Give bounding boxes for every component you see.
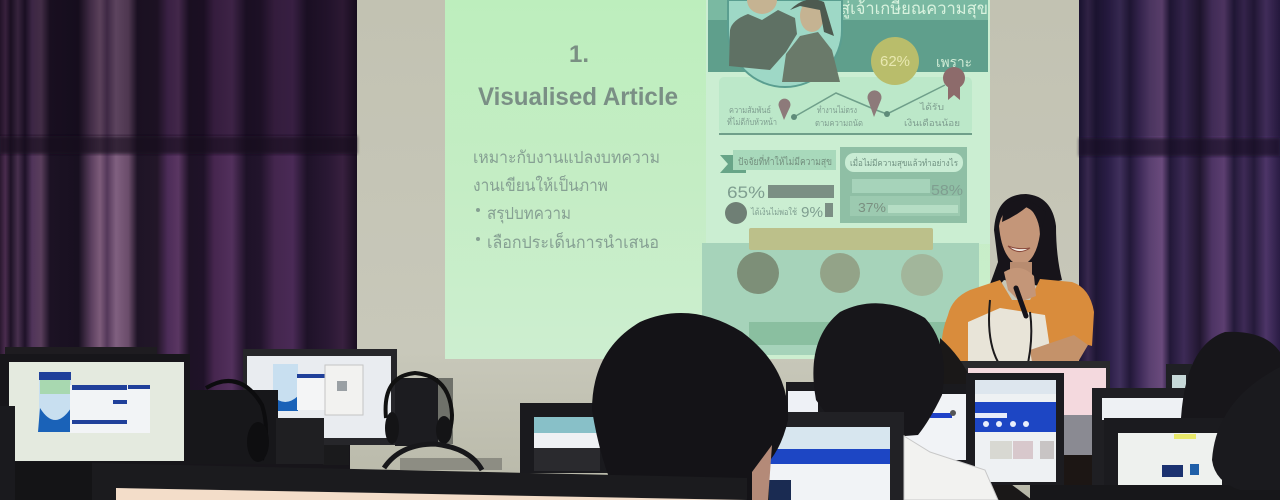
slide description: งานเขียนให้เป็นภาพ: [473, 174, 608, 195]
outcome panel: 58%: [931, 182, 963, 199]
student back head far right front: [1212, 367, 1280, 490]
neck: [1010, 262, 1032, 284]
monitor: center right blue page: [966, 373, 1096, 485]
hair: [980, 194, 1062, 310]
monitor: left screen: [0, 354, 190, 472]
monitor: rear small by head: [786, 382, 826, 422]
student head, white shirt side: [813, 303, 944, 436]
outcome panel: [840, 147, 967, 223]
pc tower with headphones left: [190, 381, 324, 464]
factors column: 9%: [801, 204, 823, 221]
illustration of two people: [728, 0, 842, 87]
dark desk area under left curtain: [0, 400, 350, 500]
wall background: [350, 0, 1090, 500]
factors column: ปัจจัยที่ทำให้ไม่มีความสุข: [738, 154, 832, 168]
monitor: center-left screen: [243, 349, 397, 465]
monitor: far right tiny: [1166, 364, 1192, 390]
ranking chart panel: ที่ไม่ดีกับหัวหน้า: [727, 115, 777, 127]
student hair behind monitors: [940, 338, 1032, 500]
monitor: back left rim: [5, 347, 157, 359]
white panel on blouse: [968, 308, 1052, 362]
bottom right desk edge: [1030, 485, 1280, 500]
infographic header band: เพราะ: [936, 54, 972, 70]
infographic background: [706, 0, 990, 244]
ranking chart panel: [719, 67, 972, 135]
monitor: far right behind presenter: [960, 361, 1110, 471]
slide heading: Visualised Article: [478, 83, 678, 111]
student back head far right top: [1181, 332, 1280, 420]
outcome panel: 37%: [858, 200, 886, 215]
62 percent badge: 62%: [880, 53, 910, 70]
factors column: 65%: [727, 183, 765, 202]
three round icons: [737, 252, 943, 296]
infographic on slide: [702, 0, 990, 355]
smile: [1008, 246, 1030, 252]
left curtain: [0, 0, 357, 400]
ranking chart panel: ทำงานไม่ตรง: [817, 105, 857, 115]
monitor: bottom foreground: [92, 463, 747, 500]
outcome panel: เมื่อไม่มีความสุขแล้วทำอย่างไร: [850, 156, 958, 169]
mic cables: [989, 300, 1031, 372]
62 percent badge: [871, 37, 919, 85]
lower-left dark equipment: [0, 406, 15, 500]
bottom strip: [749, 322, 949, 345]
desk shelf left: [400, 458, 502, 470]
right curtain: [1079, 0, 1280, 390]
monitor: center foreground: [768, 412, 904, 500]
factors column: [720, 150, 836, 224]
student with dark hair center: [592, 313, 788, 500]
face: [999, 206, 1040, 266]
ranking chart panel: ความสัมพันธ์: [729, 104, 771, 115]
projected slide: [445, 0, 990, 359]
pc tower with headphones right: [384, 373, 482, 470]
presenter: [942, 194, 1094, 372]
lower panel: [702, 243, 979, 355]
slide description: สรุปบทความ: [487, 204, 571, 224]
slide description: [473, 148, 660, 252]
ranking chart panel: ได้รับ: [919, 102, 944, 112]
factors column: ได้เงินไม่พอใช้: [750, 207, 797, 217]
right arm: [1030, 335, 1088, 362]
infographic header band: [708, 0, 988, 72]
orange blouse: [942, 279, 1094, 362]
monitor: right front explorer: [1104, 418, 1230, 490]
ranking chart panel: เงินเดือนน้อย: [904, 118, 960, 128]
hand holding microphone: [1004, 268, 1036, 316]
slide number: 1.: [569, 41, 589, 68]
slide description: เลือกประเด็นการนำเสนอ: [487, 231, 659, 252]
monitor: center small: [520, 403, 612, 473]
slide description: เหมาะกับงานแปลงบทความ: [473, 148, 660, 167]
ranking chart panel: ตามความถนัด: [815, 118, 863, 128]
monitor: right rear: [1092, 388, 1188, 488]
yellow banner: [749, 228, 933, 250]
monitor: behind shirt: [905, 384, 976, 470]
white shirt: [904, 436, 998, 500]
